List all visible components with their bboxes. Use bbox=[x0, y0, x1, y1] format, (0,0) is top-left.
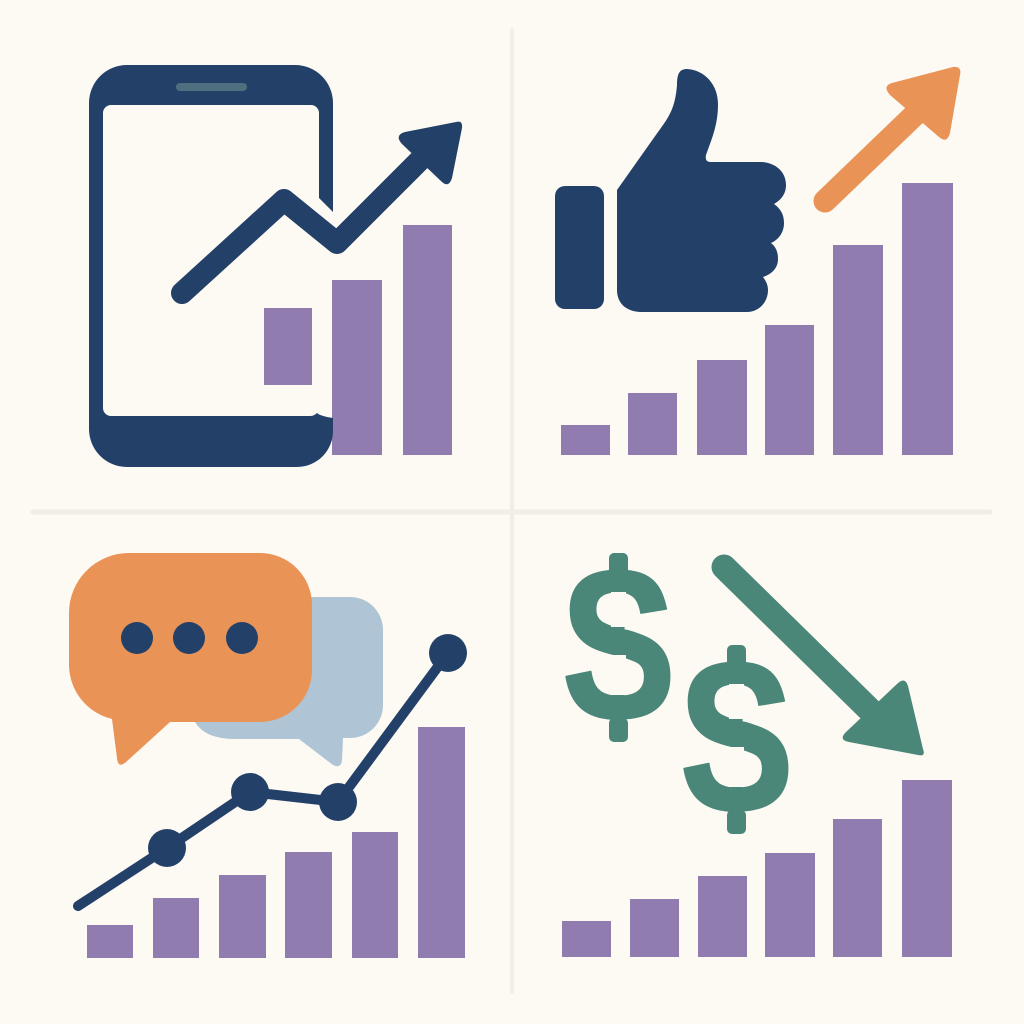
panel: mobile growth bbox=[89, 65, 462, 467]
bar chart: mobile bbox=[264, 225, 452, 455]
bar chart: conversations bbox=[87, 727, 465, 958]
icon: front speech bubble bbox=[69, 553, 312, 765]
panel: likes growth bbox=[555, 67, 960, 455]
icon: green down arrow bbox=[724, 567, 924, 755]
icon: orange up arrow bbox=[825, 67, 960, 201]
icon: dollar sign right: $ bbox=[682, 613, 790, 861]
icon: thumbs up bbox=[555, 69, 786, 312]
panel: falling cost bbox=[562, 521, 952, 957]
icon: back speech bubble bbox=[195, 597, 383, 766]
line chart with markers bbox=[78, 634, 467, 906]
icon: smartphone bbox=[89, 65, 333, 467]
bar chart: cost bbox=[562, 780, 952, 957]
icon: dollar sign left: $ bbox=[564, 521, 672, 769]
bar chart: likes bbox=[561, 183, 953, 455]
panel: conversations growth bbox=[69, 553, 467, 958]
trend arrow: mobile bbox=[182, 122, 462, 293]
